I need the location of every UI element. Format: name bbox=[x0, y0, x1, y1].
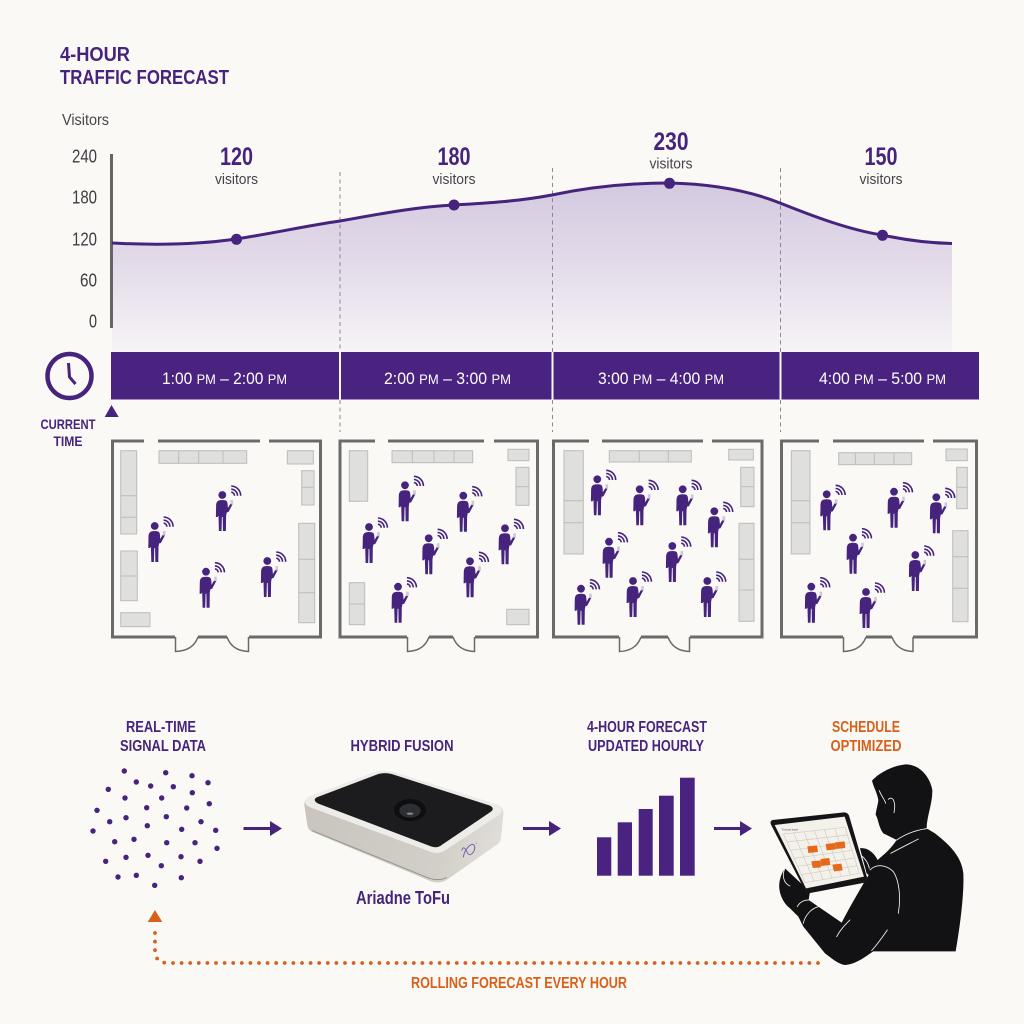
value label 2 bbox=[432, 143, 476, 188]
title: 4-HOUR bbox=[60, 44, 131, 66]
y axis labels: 180 bbox=[72, 186, 97, 208]
y axis line bbox=[110, 154, 113, 328]
chart area fill bbox=[112, 183, 952, 352]
current time marker: TIME bbox=[54, 433, 82, 449]
arrow: signal to fusion bbox=[244, 821, 282, 836]
y-axis title: Visitors bbox=[62, 112, 109, 129]
signal dot cloud bbox=[90, 768, 220, 888]
shelves bbox=[791, 449, 968, 622]
hour dividers bbox=[340, 168, 780, 432]
doors bbox=[844, 637, 913, 652]
time band: 2:00 PM – 3:00 PM bbox=[384, 369, 511, 388]
time band bbox=[111, 352, 979, 400]
doors bbox=[176, 637, 248, 652]
y axis labels: 60 bbox=[80, 270, 97, 290]
floor plan: 4 PM bbox=[782, 441, 976, 652]
step heading: schedule optimized: SCHEDULE bbox=[832, 719, 900, 736]
hand thumb bbox=[783, 868, 790, 886]
walls bbox=[340, 441, 538, 637]
device logo bbox=[462, 843, 477, 857]
title bbox=[60, 44, 229, 89]
device rim bbox=[305, 771, 502, 853]
shelves bbox=[121, 451, 315, 627]
silhouette bbox=[779, 764, 963, 965]
feedback loop label: ROLLING FORECAST EVERY HOUR bbox=[411, 975, 627, 992]
device base groove bbox=[312, 831, 447, 880]
step heading: forecast updated hourly: UPDATED HOURLY bbox=[588, 738, 704, 755]
shelves bbox=[564, 449, 754, 621]
person with tablet bbox=[771, 764, 963, 965]
clothing and hair lines bbox=[797, 791, 930, 951]
device name: Ariadne ToFu bbox=[356, 888, 450, 908]
step heading: hybrid fusion: HYBRID FUSION bbox=[350, 738, 454, 755]
device: Ariadne ToFu bbox=[304, 771, 503, 908]
step heading: forecast updated hourly bbox=[587, 719, 707, 755]
floor plan: 3 PM bbox=[554, 441, 762, 652]
y axis labels: 120 bbox=[72, 228, 97, 250]
time band: 3:00 PM – 4:00 PM bbox=[598, 369, 724, 388]
arrow: fusion to forecast bbox=[523, 821, 561, 836]
step heading: real-time signal data: SIGNAL DATA bbox=[120, 738, 206, 755]
schedule header: Forecast board bbox=[782, 828, 798, 832]
visitors bbox=[805, 483, 955, 628]
bar chart icon bbox=[597, 778, 695, 876]
tablet screen bbox=[775, 817, 864, 888]
time band: 4:00 PM – 5:00 PM bbox=[819, 369, 946, 388]
walls bbox=[112, 441, 320, 637]
value label 3 bbox=[650, 128, 692, 172]
device top bbox=[315, 773, 493, 847]
value label 3: visitors bbox=[650, 156, 692, 172]
walls bbox=[554, 441, 762, 637]
y axis labels bbox=[72, 146, 97, 332]
y axis labels: 240 bbox=[72, 146, 97, 166]
tablet frame bbox=[771, 812, 867, 893]
arrow: forecast to schedule bbox=[714, 821, 752, 836]
value label 2: 180 bbox=[438, 143, 470, 171]
title: TRAFFIC FORECAST bbox=[60, 67, 229, 89]
step heading: schedule optimized: OPTIMIZED bbox=[830, 738, 902, 755]
icon: clock bbox=[48, 354, 92, 398]
forecast curve bbox=[112, 183, 952, 244]
time band: 1:00 PM – 2:00 PM bbox=[162, 369, 287, 388]
floor plan: 2 PM bbox=[340, 441, 538, 652]
value label 4: 150 bbox=[864, 143, 898, 171]
optimized shifts bbox=[807, 841, 845, 871]
floor plan: 1 PM bbox=[112, 441, 320, 652]
step heading: real-time signal data bbox=[120, 719, 206, 755]
current time marker bbox=[40, 405, 119, 449]
step heading: schedule optimized bbox=[830, 719, 902, 755]
step heading: forecast updated hourly: 4-HOUR FORECAST bbox=[587, 719, 707, 736]
current time marker: CURRENT bbox=[40, 416, 96, 432]
visitors bbox=[575, 470, 733, 625]
lens bbox=[394, 799, 426, 821]
walls bbox=[782, 441, 976, 637]
visitors bbox=[363, 476, 523, 623]
area chart: visitors per hour bbox=[72, 128, 952, 432]
device body bbox=[304, 771, 503, 883]
value label 1 bbox=[215, 143, 258, 188]
feedback loop dotted arrow bbox=[148, 910, 818, 963]
value label 4: visitors bbox=[860, 171, 902, 188]
device hardware bbox=[304, 771, 503, 883]
value label 2: visitors bbox=[432, 171, 476, 188]
y axis labels: 0 bbox=[89, 310, 97, 332]
value label 1: 120 bbox=[220, 143, 253, 171]
visitors bbox=[148, 486, 286, 608]
shelves bbox=[349, 449, 529, 625]
value label 3: 230 bbox=[654, 128, 688, 156]
step heading: real-time signal data: REAL-TIME bbox=[126, 719, 196, 736]
doors bbox=[620, 637, 690, 652]
tablet grid bbox=[783, 827, 859, 883]
value label 4 bbox=[860, 143, 902, 188]
value label 1: visitors bbox=[215, 171, 258, 188]
doors bbox=[408, 637, 474, 652]
data points bbox=[231, 178, 888, 245]
